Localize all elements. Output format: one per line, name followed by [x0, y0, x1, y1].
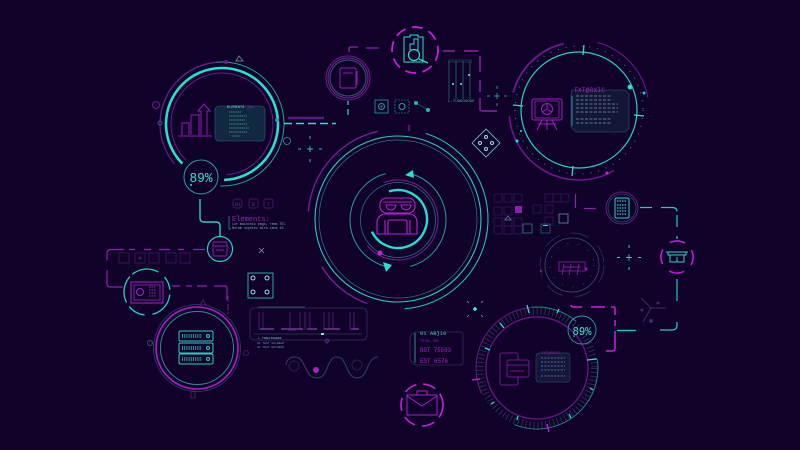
gauge: 89 percent bottom: 89%	[572, 326, 592, 339]
icon: notebook ring	[326, 56, 370, 115]
panel: server ring	[148, 300, 248, 398]
gauge: 89 percent top	[184, 160, 218, 194]
heat grid	[494, 194, 569, 234]
panel: growth chart ring	[135, 37, 309, 211]
chart: film strip bars: 02 TEXT GOLDBAR	[257, 346, 284, 349]
connector: cyan dashed from ring	[284, 118, 336, 124]
icon: window ring	[208, 236, 232, 262]
chart: film strip bars: + TIMELINEBAR	[258, 337, 282, 340]
icon: triangle markers	[405, 170, 414, 178]
connector: purple dash to sliders	[443, 51, 497, 111]
panel: card ring bottom right	[456, 287, 618, 449]
text block: budget data panel: TOTAL 002	[420, 340, 439, 344]
text block: elements note	[229, 199, 285, 230]
panel: central robot core	[283, 104, 513, 334]
icon: small crosshair top right	[487, 86, 507, 106]
text block: budget data panel: EST 6576	[420, 358, 448, 365]
chart: film strip bars	[250, 307, 367, 349]
icon: row of small squares	[119, 253, 190, 263]
chart: slider box: L.TUGGOGOGO	[448, 100, 475, 104]
text block: elements table: TAG	[247, 106, 253, 110]
gauge: 89 percent top: 89%	[190, 171, 213, 187]
icon: briefcase ring	[401, 384, 443, 426]
icon: square widgets	[375, 100, 430, 113]
text block: budget data panel	[410, 330, 463, 365]
text block: elements note: B	[252, 202, 255, 208]
chart: slider box	[448, 60, 475, 104]
text block: tutorial table: TXT@RXIC	[574, 87, 605, 94]
text block: tutorial table: ....	[611, 133, 618, 136]
wave timeline	[286, 357, 378, 378]
gauge: 89 percent bottom	[568, 316, 596, 344]
connector: gauge to window icon	[200, 199, 220, 237]
connector: purple dashed frame	[107, 250, 227, 300]
connector: purple divider	[227, 296, 229, 314]
text block: elements note: Lor mainchik pago, rema TEL	[232, 222, 285, 226]
icon: server stack	[179, 331, 213, 364]
icon: tri spoke	[640, 298, 666, 323]
icon: safe ring	[115, 260, 179, 324]
chart: film strip bars: 01 TEXT GOLDBAR	[257, 342, 284, 345]
icon: triangle marker	[236, 56, 243, 61]
text block: elements note: Noram sopotec mira cana 10	[232, 226, 283, 230]
text block: elements table: ELEMENTS	[227, 106, 244, 110]
icon: calculator ring	[606, 192, 638, 224]
panel: presentation ring	[483, 14, 675, 206]
icon: clipboard ring	[392, 27, 438, 73]
icon: team ring	[540, 233, 604, 297]
text block: tutorial table	[571, 87, 629, 136]
text block: budget data panel: 01 AB}10	[420, 330, 446, 337]
icon: small crosshair left	[298, 136, 322, 162]
text block: elements note: Elements:	[232, 216, 270, 224]
icon: robot	[377, 198, 417, 234]
text block: elements table	[215, 106, 265, 141]
icon: small crosshair right	[617, 245, 641, 270]
connector: cyan dashes right	[618, 208, 677, 330]
connector: purple dash to clipboard	[349, 47, 379, 52]
connector: magenta path	[571, 305, 615, 351]
icon: bar chart arrow	[178, 104, 212, 136]
text block: budget data panel: BGT 75593	[420, 347, 451, 354]
text block: tutorial grid: TXT@RXIC	[541, 351, 561, 356]
connector: purple dashes near grid	[576, 194, 596, 208]
icon: cross target	[467, 301, 483, 317]
icon: diamond	[472, 129, 500, 157]
text block: elements note: 01	[235, 202, 241, 208]
text block: tutorial grid	[536, 351, 570, 382]
connector: cyan line to gauge	[617, 330, 633, 332]
icon: cross small	[259, 248, 264, 253]
icon: presentation easel	[532, 99, 562, 130]
text block: elements note: 1	[267, 202, 270, 208]
icon: four-dot square	[248, 273, 273, 298]
icon: atm ring	[656, 236, 698, 278]
icon: phone and card	[500, 353, 529, 385]
